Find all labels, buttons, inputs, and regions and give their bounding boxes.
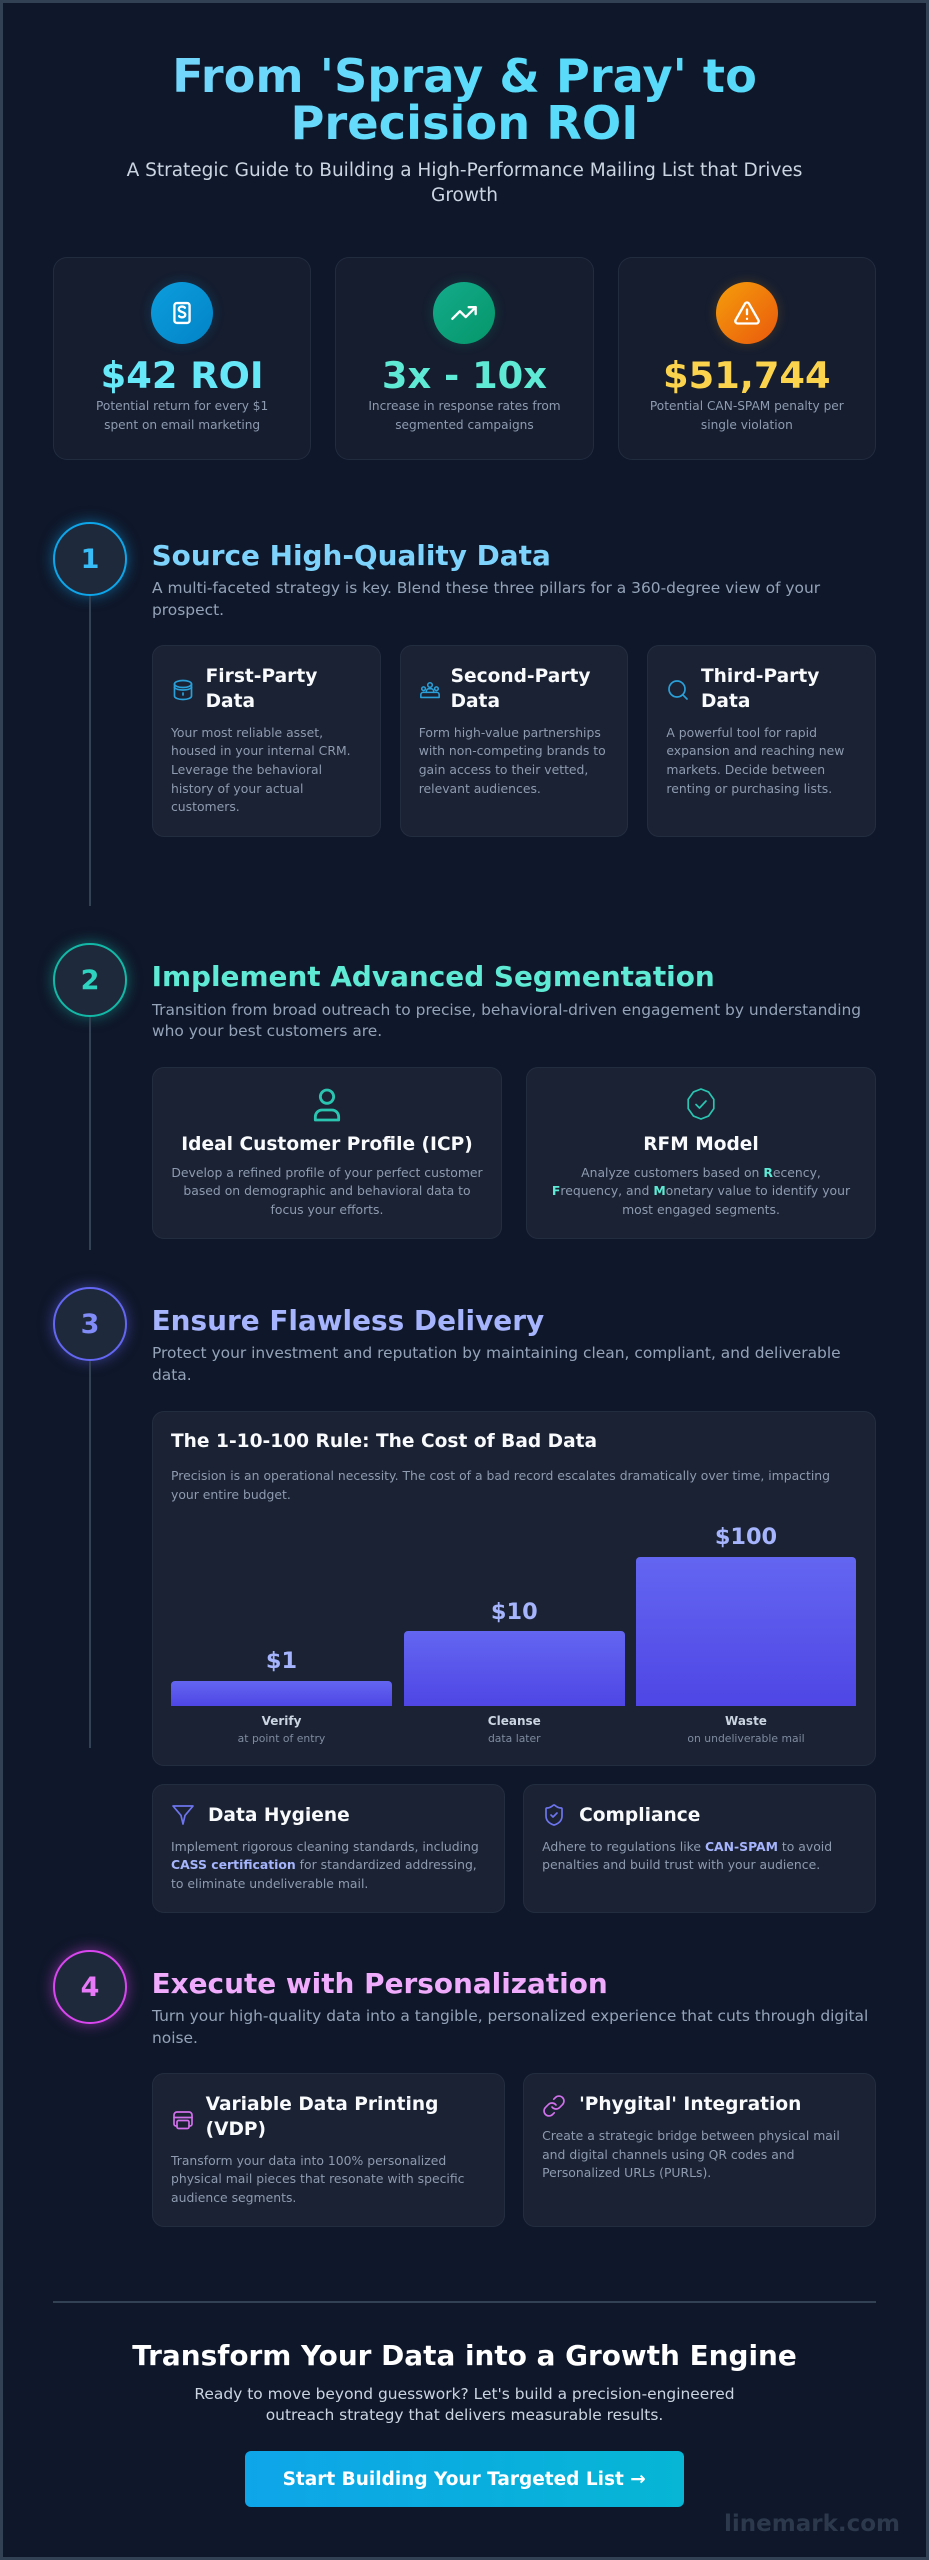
icon: link	[543, 2095, 565, 2117]
card title	[206, 666, 317, 712]
card text: markets. Decide between	[666, 762, 825, 777]
card text: renting or purchasing lists.	[666, 781, 832, 796]
card text: physical mail pieces that resonate with specific	[171, 2171, 464, 2186]
bar verify	[171, 1681, 392, 1706]
lead text: Transition from broad outreach to precise, behavioral-driven engagement by understanding	[152, 1001, 861, 1019]
card title: Data Hygiene	[208, 1805, 350, 1826]
subtitle: A Strategic Guide to Building a High-Performance Mailing List that Drives	[127, 160, 802, 181]
card title: Compliance	[579, 1805, 700, 1826]
card title: Data	[701, 691, 750, 712]
card title	[701, 666, 819, 712]
lead text: data.	[152, 1366, 192, 1384]
call to action text: Ready to move beyond guesswork? Let's build a precision-engineered	[194, 2385, 735, 2403]
icon: funnel	[172, 1805, 194, 1825]
card title	[451, 666, 590, 712]
card: third-party data	[647, 645, 876, 837]
icon: warning triangle	[716, 282, 778, 344]
heading: Source High-Quality Data	[152, 539, 551, 572]
card text: gain access to their vetted,	[419, 762, 588, 777]
panel text: your entire budget.	[171, 1487, 291, 1502]
title: Precision ROI	[290, 96, 639, 150]
title: From 'Spray & Pray' to	[172, 49, 757, 103]
icon: people	[420, 682, 440, 698]
heading: Execute with Personalization	[152, 1967, 608, 2000]
step number 3	[53, 1287, 127, 1361]
card text	[666, 725, 844, 796]
subtitle: Growth	[431, 185, 498, 206]
description: Potential return for every $1	[96, 399, 268, 413]
bar value $10: $10	[491, 1599, 538, 1625]
bar value $1: $1	[266, 1648, 297, 1674]
stat card: response rate	[335, 257, 594, 460]
panel: 1-10-100 rule	[152, 1411, 876, 1766]
label waste: Waste	[725, 1714, 767, 1728]
lead text: prospect.	[152, 601, 224, 619]
sublabel cleanse: data later	[488, 1732, 541, 1745]
header	[126, 49, 802, 206]
icon: user	[314, 1088, 340, 1122]
card title: First-Party	[206, 666, 317, 687]
call to action text	[194, 2385, 735, 2424]
card text: history of your actual	[171, 781, 303, 796]
card text: expansion and reaching new	[666, 743, 844, 758]
label cleanse: Cleanse	[488, 1714, 541, 1728]
step number 2	[53, 943, 127, 1017]
panel text	[171, 1468, 830, 1502]
card: first-party data	[152, 645, 380, 837]
lead text: who your best customers are.	[152, 1022, 382, 1040]
card: phygital integration	[523, 2073, 876, 2227]
lead text	[152, 2007, 868, 2047]
card text	[171, 1165, 483, 1217]
button	[245, 2451, 684, 2507]
lead text: Turn your high-quality data into a tangible, personalized experience that cuts through digital	[152, 2007, 868, 2025]
description	[650, 399, 844, 432]
icon: dollar document	[151, 282, 213, 344]
card text: Personalized URLs (PURLs).	[542, 2165, 711, 2180]
icon: database	[174, 680, 192, 700]
value: 3x - 10x	[382, 354, 547, 396]
lead text	[152, 1344, 841, 1384]
value: $42 ROI	[101, 354, 264, 396]
card text: Transform your data into 100% personalized	[171, 2153, 446, 2168]
button: Start Building Your Targeted List →	[283, 2469, 646, 2490]
card text: focus your efforts.	[271, 1202, 383, 1217]
icon: badge check	[687, 1088, 715, 1120]
card text: audience segments.	[171, 2190, 296, 2205]
card text: Implement rigorous cleaning standards, including	[171, 1839, 479, 1854]
card text: customers.	[171, 799, 240, 814]
card text	[171, 725, 351, 814]
card text: Develop a refined profile of your perfect customer	[171, 1165, 483, 1180]
step number 2: 2	[81, 965, 99, 996]
sublabel waste: on undeliverable mail	[687, 1732, 805, 1745]
description: segmented campaigns	[395, 418, 534, 432]
card text: most engaged segments.	[622, 1202, 780, 1217]
card title: Ideal Customer Profile (ICP)	[181, 1134, 473, 1155]
card text: Frequency, and Monetary value to identify your	[552, 1183, 850, 1198]
lead text: A multi-faceted strategy is key. Blend these three pillars for a 360-degree view of your	[152, 579, 820, 597]
icon: trending up	[433, 282, 495, 344]
icon: printer	[173, 2111, 193, 2130]
card text	[170, 2153, 464, 2205]
heading: Implement Advanced Segmentation	[152, 960, 715, 993]
subtitle	[126, 160, 802, 206]
card: data hygiene	[152, 1784, 505, 1913]
card text: penalties and build trust with your audience.	[542, 1857, 820, 1872]
step 3: delivery	[44, 1278, 876, 1913]
description	[368, 399, 561, 432]
stat card: ROI	[53, 257, 311, 460]
step number 4: 4	[81, 1972, 99, 2002]
label verify: Verify	[262, 1714, 301, 1728]
step 2: segmentation	[46, 936, 876, 1250]
card text	[552, 1165, 850, 1217]
panel title: The 1-10-100 Rule: The Cost of Bad Data	[171, 1431, 597, 1452]
step 1: source data	[44, 514, 876, 906]
card title: Second-Party	[451, 666, 590, 687]
description: single violation	[701, 418, 793, 432]
call to action text: outreach strategy that delivers measurable results.	[266, 2406, 663, 2424]
step number 4	[53, 1950, 127, 2024]
card text: Analyze customers based on Recency,	[581, 1165, 821, 1180]
step number 1: 1	[81, 544, 99, 574]
card: second-party data	[400, 645, 628, 837]
card text: A powerful tool for rapid	[666, 725, 817, 740]
step number 3: 3	[81, 1309, 99, 1340]
bar waste	[636, 1557, 856, 1706]
heading: Ensure Flawless Delivery	[152, 1304, 544, 1337]
card: variable data printing	[152, 2073, 505, 2227]
lead text: noise.	[152, 2029, 198, 2047]
card text: Create a strategic bridge between physical mail	[542, 2128, 840, 2143]
description	[96, 399, 268, 432]
card title: Data	[206, 691, 255, 712]
bar chart	[171, 1524, 856, 1745]
card: RFM model	[526, 1067, 876, 1239]
icon: search	[668, 680, 688, 700]
card text: relevant audiences.	[419, 781, 541, 796]
watermark: linemark.com	[724, 2511, 900, 2537]
card text	[542, 1839, 832, 1872]
card text: CASS certification for standardized addressing,	[171, 1857, 477, 1872]
card text: with non-competing brands to	[419, 743, 606, 758]
card text: and digital channels using QR codes and	[542, 2147, 795, 2162]
card text	[542, 2128, 840, 2180]
lead text: Protect your investment and reputation by maintaining clean, compliant, and deliverable	[152, 1344, 841, 1362]
card text: Adhere to regulations like CAN-SPAM to avoid	[542, 1839, 832, 1854]
step 4: personalization	[44, 1942, 876, 2227]
lead text	[152, 1001, 861, 1040]
icon: shield check	[545, 1804, 563, 1826]
card text: Your most reliable asset,	[171, 725, 323, 740]
card text: Form high-value partnerships	[419, 725, 601, 740]
card title: RFM Model	[643, 1134, 759, 1155]
card text	[171, 1839, 479, 1891]
key statistics row	[53, 257, 876, 460]
description: spent on email marketing	[104, 418, 260, 432]
card text: to eliminate undeliverable mail.	[171, 1876, 368, 1891]
panel text: Precision is an operational necessity. The cost of a bad record escalates dramatically over time, impacting	[171, 1468, 830, 1483]
card: ideal customer profile	[152, 1067, 502, 1239]
step number 1	[53, 522, 127, 596]
footer call to action	[53, 2301, 876, 2507]
title	[53, 53, 876, 146]
description: Potential CAN-SPAM penalty per	[650, 399, 844, 413]
card title	[206, 2094, 438, 2140]
card title: Variable Data Printing	[206, 2094, 438, 2115]
card: compliance	[523, 1784, 876, 1913]
bar cleanse	[404, 1631, 625, 1706]
call to action heading: Transform Your Data into a Growth Engine	[132, 2339, 797, 2372]
card text: based on demographic and behavioral data to	[183, 1183, 471, 1198]
card title: 'Phygital' Integration	[579, 2094, 801, 2115]
card title: Data	[451, 691, 500, 712]
value: $51,744	[663, 354, 831, 396]
stat card: penalty	[618, 257, 876, 460]
lead text	[152, 579, 820, 619]
card title: (VDP)	[206, 2119, 266, 2140]
card title: Third-Party	[701, 666, 819, 687]
bar value $100: $100	[715, 1524, 777, 1550]
card text	[419, 725, 606, 796]
sublabel verify: at point of entry	[238, 1732, 325, 1745]
card text: Leverage the behavioral	[171, 762, 322, 777]
card text: housed in your internal CRM.	[171, 743, 351, 758]
description: Increase in response rates from	[368, 399, 561, 413]
